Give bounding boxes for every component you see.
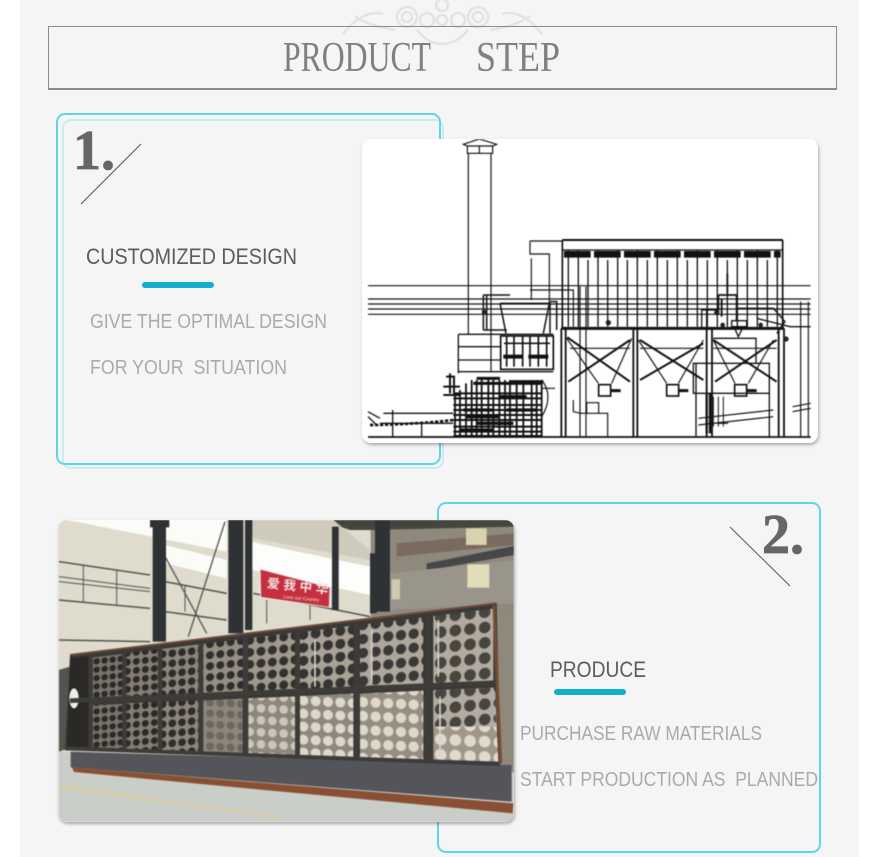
step 2 description (520, 723, 818, 791)
image: perforated steel structure photo (58, 520, 514, 822)
panel: step 2 outline (437, 502, 821, 853)
step 1 description: FOR YOUR SITUATION (90, 357, 287, 379)
step 1 description (90, 311, 327, 379)
decorative ornament above title (342, 0, 543, 46)
step number 2: 2. (762, 505, 804, 566)
step 1 heading (86, 244, 297, 288)
step 2 heading (550, 657, 646, 695)
image: plant schematic drawing (362, 139, 818, 443)
base beam (71, 752, 512, 802)
title: STEP (476, 35, 560, 81)
red banner: 爱我中华 (266, 572, 330, 598)
step 2 description: PURCHASE RAW MATERIALS (520, 723, 762, 745)
step number 2 (730, 505, 804, 586)
step number 1 (73, 125, 142, 204)
red banner: Love our Country (283, 594, 320, 603)
red banner (260, 569, 330, 607)
floor (59, 752, 514, 822)
title: PRODUCT (283, 35, 431, 81)
steel frame (65, 603, 501, 765)
title box (48, 26, 837, 90)
panel: step 1 outline (56, 113, 444, 469)
